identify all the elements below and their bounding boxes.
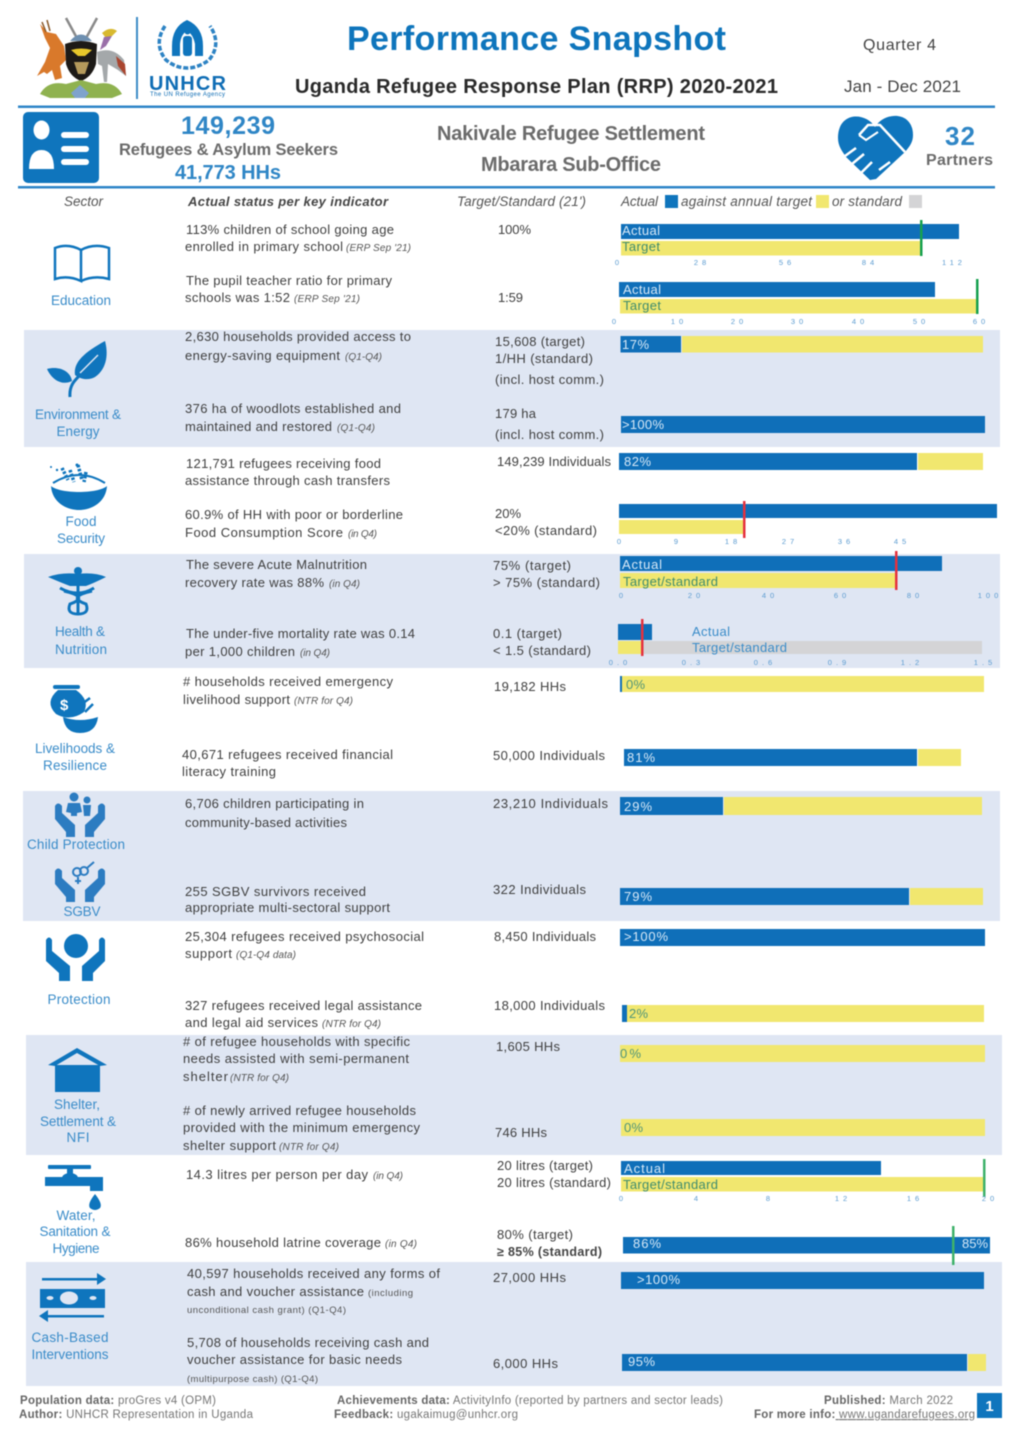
indicator: specific needs shelter: (NTR for Q4) xyxy=(230,1073,289,1084)
indicator: emergency shelter: (NTR for Q4) xyxy=(279,1142,339,1153)
indicator: litres per person: 12 xyxy=(835,1194,851,1203)
divider xyxy=(136,17,138,99)
panel: health and nutrition xyxy=(24,551,1002,668)
indicator: SGBV survivors: 255 SGBV survivors received xyxy=(185,884,366,899)
indicator: specific needs shelter: shelter xyxy=(183,1069,229,1084)
icon: UNHCR logo: The UN Refugee Agency xyxy=(150,92,225,98)
indicator: child participation: 29% xyxy=(624,799,652,814)
indicator: energy-saving: 2,630 households provided access to xyxy=(185,329,411,344)
indicator: litres per person: 4 xyxy=(694,1194,702,1203)
footer xyxy=(19,1395,975,1421)
icon: handshake heart xyxy=(838,116,913,180)
panel: cash-based interventions: Interventions xyxy=(32,1347,109,1362)
indicator: legal assistance: 327 refugees received legal assistance xyxy=(185,998,422,1013)
indicator: legal assistance: (NTR for Q4) xyxy=(322,1019,381,1030)
indicator: pupil teacher ratio: (ERP Sep '21) xyxy=(294,294,360,305)
indicator: acute malnutrition: 80 xyxy=(907,591,923,600)
indicator: financial literacy: literacy training xyxy=(182,764,276,779)
location xyxy=(437,123,705,176)
indicator: enrolment: Target xyxy=(622,239,660,254)
indicator: under-five mortality: 0.6 xyxy=(754,658,776,667)
indicator: enrolment: Actual xyxy=(622,223,660,238)
panel: environment and energy: Energy xyxy=(56,424,100,439)
indicator: enrolment: 84 xyxy=(862,258,878,267)
indicator: cash and voucher assistance: (including xyxy=(368,1288,413,1299)
indicator: litres per person: (in Q4) xyxy=(373,1171,403,1182)
indicator: enrolment xyxy=(185,220,966,267)
indicator: cash transfers xyxy=(185,453,983,488)
indicator: latrine coverage: 85% xyxy=(962,1236,988,1251)
indicator: latrine coverage: 86% household latrine coverage xyxy=(185,1235,381,1250)
table header and legend: against annual target xyxy=(681,194,813,209)
indicator: food consumption score xyxy=(185,501,997,546)
indicator: latrine coverage: ≥ 85% (standard) xyxy=(497,1245,602,1259)
indicator: under-five mortality: (in Q4) xyxy=(300,648,330,659)
indicator: specific needs shelter: needs assisted with semi-permanent xyxy=(183,1051,409,1066)
footer: Author: UNHCR Representation in Uganda xyxy=(19,1409,254,1421)
indicator: acute malnutrition: 20 xyxy=(688,591,704,600)
indicator: energy-saving: 17% xyxy=(622,337,649,352)
indicator: food consumption score: 20% xyxy=(495,506,521,521)
indicator: specific needs shelter: # of refugee households with specific xyxy=(183,1034,410,1049)
indicator: emergency livelihood: 0% xyxy=(626,677,645,692)
indicator: food consumption score: 18 xyxy=(725,537,741,546)
indicator: emergency shelter: 746 HHs xyxy=(495,1125,548,1140)
panel: livelihoods and resilience xyxy=(35,674,984,779)
indicator: litres per person: Actual xyxy=(624,1161,665,1176)
indicator: cash transfers: 149,239 Individuals xyxy=(497,454,612,469)
indicator: under-five mortality: 1.2 xyxy=(901,658,923,667)
sector label: Food xyxy=(66,514,96,529)
sector label: Environment & xyxy=(35,407,121,422)
sector label: SGBV xyxy=(64,904,100,919)
population figure: Refugees & Asylum Seekers xyxy=(119,141,338,159)
indicator: food consumption score: 45 xyxy=(894,537,910,546)
indicator: psychosocial support: (Q1-Q4 data) xyxy=(236,950,296,961)
indicator: woodlots xyxy=(185,401,985,442)
indicator: litres per person: 20 litres (standard) xyxy=(497,1175,611,1190)
indicator: acute malnutrition: (in Q4) xyxy=(329,579,360,590)
indicator: enrolment: 28 xyxy=(694,258,710,267)
table header and legend: Actual status per key indicator xyxy=(187,194,389,209)
icon: id card xyxy=(23,112,99,183)
panel: shelter, settlement and NFI: NFI xyxy=(66,1130,90,1145)
indicator: under-five mortality: < 1.5 (standard) xyxy=(493,643,591,658)
indicator: emergency livelihood: livelihood support xyxy=(183,692,290,707)
indicator: financial literacy xyxy=(182,747,961,779)
indicator: legal assistance: and legal aid services xyxy=(185,1015,318,1030)
indicator: emergency livelihood: 19,182 HHs xyxy=(494,679,566,694)
indicator: litres per person xyxy=(186,1158,998,1203)
location: Mbarara Sub-Office xyxy=(481,154,661,176)
indicator: SGBV survivors: 322 Individuals xyxy=(493,882,586,897)
indicator: psychosocial support: 8,450 Individuals xyxy=(494,929,596,944)
icon: money bag and bowl xyxy=(50,685,98,733)
subtitle: Uganda Refugee Response Plan (RRP) 2020-2021 xyxy=(295,76,778,98)
indicator: child participation xyxy=(185,796,982,830)
indicator: under-five mortality: 0.9 xyxy=(828,658,850,667)
sector label: Cash-Based xyxy=(32,1330,108,1345)
icon: food bowl xyxy=(50,464,107,510)
indicator: under-five mortality xyxy=(185,619,996,667)
indicator: financial literacy: 81% xyxy=(627,750,655,765)
icon: water tap and drop xyxy=(45,1165,103,1210)
indicator: woodlots: (Q1-Q4) xyxy=(337,423,375,434)
indicator: under-five mortality: The under-five mortality rate was 0.14 xyxy=(186,626,415,641)
indicator: basic needs cash: 6,000 HHs xyxy=(493,1356,558,1371)
population figure: 41,773 HHs xyxy=(175,162,281,184)
indicator: litres per person: 14.3 litres per person per day xyxy=(186,1167,368,1182)
indicator: emergency livelihood xyxy=(183,674,984,707)
indicator: emergency shelter xyxy=(183,1103,985,1153)
table header and legend: or standard xyxy=(832,194,902,209)
indicator: acute malnutrition: recovery rate was 88% xyxy=(185,575,324,590)
sector label: Livelihoods & xyxy=(35,741,115,756)
indicator: litres per person: 20 xyxy=(982,1194,998,1203)
panel: education xyxy=(51,220,989,326)
indicator: cash and voucher assistance: cash and voucher assistance xyxy=(187,1284,364,1299)
indicator: emergency shelter: shelter support xyxy=(183,1138,276,1153)
partners xyxy=(926,121,993,169)
icon: hands with gender symbols xyxy=(55,862,105,902)
indicator: psychosocial support: support xyxy=(185,946,232,961)
indicator: child participation: 6,706 children participating in xyxy=(185,796,364,811)
indicator: basic needs cash: 95% xyxy=(628,1354,655,1369)
indicator: emergency shelter: provided with the minimum emergency xyxy=(183,1120,420,1135)
indicator: SGBV survivors: appropriate multi-sectoral support xyxy=(185,900,390,915)
indicator: cash and voucher assistance: 40,597 households received any forms of xyxy=(187,1266,440,1281)
summary strip xyxy=(23,112,993,184)
footer: Achievements data: ActivityInfo (reported by partners and sector leads) xyxy=(337,1395,723,1407)
indicator: cash and voucher assistance: 27,000 HHs xyxy=(493,1270,566,1285)
indicator: emergency livelihood: # households received emergency xyxy=(183,674,394,689)
indicator: acute malnutrition xyxy=(185,551,1002,600)
icon: book xyxy=(55,246,109,281)
indicator: energy-saving: (Q1-Q4) xyxy=(345,352,382,363)
indicator: emergency livelihood: (NTR for Q4) xyxy=(294,696,353,707)
indicator: enrolment: 100% xyxy=(498,222,531,237)
indicator: pupil teacher ratio: Actual xyxy=(623,282,661,297)
indicator: enrolment: (ERP Sep '21) xyxy=(346,243,411,254)
indicator: legal assistance: 2% xyxy=(629,1006,648,1021)
table header and legend: Actual xyxy=(620,194,659,209)
indicator: under-five mortality: 0.0 xyxy=(609,658,631,667)
partners: Partners xyxy=(926,152,993,169)
indicator: under-five mortality: 1.5 xyxy=(974,658,996,667)
indicator: enrolment: enrolled in primary school xyxy=(185,239,343,254)
indicator: energy-saving: 15,608 (target) xyxy=(495,334,585,349)
indicator: cash and voucher assistance xyxy=(187,1266,984,1316)
indicator: woodlots: (incl. host comm.) xyxy=(495,427,604,442)
indicator: pupil teacher ratio: Target xyxy=(623,298,661,313)
indicator: energy-saving: 1/HH (standard) xyxy=(495,351,593,366)
indicator: woodlots: 376 ha of woodlots established and xyxy=(185,401,401,416)
indicator: acute malnutrition: The severe Acute Malnutrition xyxy=(186,557,367,572)
indicator: pupil teacher ratio: The pupil teacher ratio for primary xyxy=(186,273,392,288)
indicator: acute malnutrition: 100 xyxy=(978,591,1002,600)
footer: For more info: www.ugandarefugees.org xyxy=(754,1409,975,1421)
indicator: food consumption score: Food Consumption Score xyxy=(185,525,343,540)
indicator: enrolment: 56 xyxy=(779,258,795,267)
icon: protecting hands xyxy=(46,934,105,981)
indicator: specific needs shelter: 0% xyxy=(620,1046,641,1061)
indicator: enrolment: 112 xyxy=(942,258,966,267)
indicator: cash transfers: assistance through cash transfers xyxy=(185,473,390,488)
indicator: enrolment: 0 xyxy=(615,258,623,267)
indicator: pupil teacher ratio: 30 xyxy=(791,317,807,326)
sector label: Shelter, xyxy=(54,1097,100,1112)
table header and legend: Sector xyxy=(64,194,104,209)
sector label: Education xyxy=(51,293,111,308)
indicator: under-five mortality: Target/standard xyxy=(692,640,787,655)
indicator: cash and voucher assistance: unconditional cash grant) (Q1-Q4) xyxy=(187,1305,346,1316)
indicator: energy-saving: (incl. host comm.) xyxy=(495,372,604,387)
indicator: acute malnutrition: 40 xyxy=(762,591,778,600)
indicator: food consumption score: 27 xyxy=(782,537,798,546)
panel: food security: Security xyxy=(57,531,105,546)
location: Nakivale Refugee Settlement xyxy=(437,123,705,145)
indicator: acute malnutrition: Target/standard xyxy=(623,574,718,589)
indicator: litres per person: 0 xyxy=(619,1194,627,1203)
footer: Published: March 2022 xyxy=(824,1395,953,1407)
indicator: specific needs shelter: 1,605 HHs xyxy=(496,1039,560,1054)
sector label: Child Protection xyxy=(27,837,125,852)
partners: 32 xyxy=(945,121,975,151)
indicator: pupil teacher ratio: 60 xyxy=(973,317,989,326)
indicator: acute malnutrition: 60 xyxy=(834,591,850,600)
indicator: emergency shelter: 0% xyxy=(624,1120,643,1135)
footer: Population data: proGres v4 (OPM) xyxy=(20,1395,216,1407)
panel: shelter, settlement and NFI xyxy=(26,1034,1002,1155)
indicator: basic needs cash: (multipurpose cash) (Q1-Q4) xyxy=(187,1374,318,1385)
panel: cash-based interventions xyxy=(26,1262,1002,1386)
indicator: child participation: community-based activities xyxy=(185,815,348,830)
title: Performance Snapshot xyxy=(347,20,726,58)
indicator: psychosocial support xyxy=(185,929,985,961)
population figure xyxy=(119,112,338,184)
indicator: emergency shelter: # of newly arrived refugee households xyxy=(183,1103,416,1118)
date range: Jan - Dec 2021 xyxy=(844,77,961,96)
icon: hands with children xyxy=(55,792,105,837)
indicator: cash and voucher assistance: >100% xyxy=(637,1272,680,1287)
panel: livelihoods and resilience: Resilience xyxy=(43,758,107,773)
table header and legend: Target/Standard (21') xyxy=(457,194,586,209)
header xyxy=(37,17,961,99)
indicator: specific needs shelter xyxy=(183,1034,985,1084)
indicator: woodlots: 179 ha xyxy=(495,406,537,421)
indicator: pupil teacher ratio: 40 xyxy=(852,317,868,326)
indicator: food consumption score: (in Q4) xyxy=(348,529,377,540)
indicator: pupil teacher ratio: schools was 1:52 xyxy=(185,290,290,305)
indicator: latrine coverage: 86% xyxy=(633,1236,661,1251)
icon: cash with arrows xyxy=(39,1273,106,1322)
indicator: financial literacy: 40,671 refugees received financial xyxy=(182,747,393,762)
indicator: food consumption score: 36 xyxy=(838,537,854,546)
indicator: litres per person: 8 xyxy=(766,1194,774,1203)
footer: Feedback: ugakaimug@unhcr.org xyxy=(334,1409,518,1421)
indicator: litres per person: 16 xyxy=(907,1194,923,1203)
indicator: financial literacy: 50,000 Individuals xyxy=(493,748,606,763)
indicator: pupil teacher ratio: 10 xyxy=(671,317,687,326)
indicator: litres per person: 20 litres (target) xyxy=(497,1158,593,1173)
icon: coat of arms xyxy=(37,18,126,98)
sector label: Water, xyxy=(56,1208,96,1223)
indicator: acute malnutrition: 75% (target) xyxy=(493,558,571,573)
indicator: litres per person: Target/standard xyxy=(623,1177,718,1192)
indicator: SGBV survivors xyxy=(185,882,983,915)
sector label: Health & xyxy=(55,624,105,639)
indicator: legal assistance xyxy=(185,998,984,1030)
indicator: latrine coverage: 80% (target) xyxy=(497,1227,573,1242)
panel: shelter, settlement and NFI: Settlement & xyxy=(40,1114,116,1129)
sector label: Protection xyxy=(48,992,110,1007)
indicator: latrine coverage xyxy=(185,1227,990,1259)
page number: 1 xyxy=(985,1398,994,1415)
indicator: SGBV survivors: 79% xyxy=(624,889,652,904)
indicator: food consumption score: 9 xyxy=(674,537,682,546)
indicator: woodlots: maintained and restored xyxy=(185,419,332,434)
indicator: acute malnutrition: Actual xyxy=(622,557,662,572)
quarter label: Quarter 4 xyxy=(863,37,936,54)
indicator: psychosocial support: >100% xyxy=(624,929,668,944)
indicator: enrolment: 113% children of school going age xyxy=(186,222,394,237)
indicator: pupil teacher ratio: 20 xyxy=(731,317,747,326)
indicator: pupil teacher ratio: 1:59 xyxy=(498,290,523,305)
indicator: psychosocial support: 25,304 refugees received psychosocial xyxy=(185,929,424,944)
icon: caduceus xyxy=(48,567,106,614)
icon: house xyxy=(48,1048,107,1092)
indicator: energy-saving: energy-saving equipment xyxy=(185,348,340,363)
icon: money bag and bowl: $ xyxy=(60,697,69,714)
indicator: legal assistance: 18,000 Individuals xyxy=(494,998,606,1013)
population figure: 149,239 xyxy=(181,112,275,140)
panel: water, sanitation and hygiene: Hygiene xyxy=(52,1241,100,1256)
indicator: basic needs cash: voucher assistance for basic needs xyxy=(187,1352,402,1367)
indicator: food consumption score: 0 xyxy=(617,537,625,546)
indicator: cash transfers: 82% xyxy=(624,454,651,469)
icon: leaf xyxy=(47,341,107,397)
icon: UNHCR logo: UNHCR xyxy=(149,73,227,95)
panel: food security xyxy=(50,453,997,546)
icon: UNHCR logo xyxy=(149,20,227,98)
page number xyxy=(977,1393,1002,1418)
indicator: woodlots: >100% xyxy=(622,417,664,432)
indicator: basic needs cash xyxy=(187,1335,986,1385)
indicator: acute malnutrition: 0 xyxy=(619,591,627,600)
indicator: pupil teacher ratio xyxy=(185,273,989,326)
panel: environment and energy xyxy=(24,329,1000,447)
indicator: basic needs cash: 5,708 of households receiving cash and xyxy=(187,1335,429,1350)
table header and legend xyxy=(64,194,922,209)
indicator: energy-saving xyxy=(185,329,983,387)
panel: child protection and SGBV xyxy=(23,791,1000,921)
indicator: food consumption score: 60.9% of HH with poor or borderline xyxy=(185,507,403,522)
indicator: pupil teacher ratio: 0 xyxy=(612,317,620,326)
panel: water, sanitation and hygiene: Sanitation & xyxy=(40,1224,110,1239)
panel: protection xyxy=(46,929,985,1030)
indicator: under-five mortality: 0.3 xyxy=(682,658,704,667)
indicator: under-five mortality: per 1,000 children xyxy=(185,644,295,659)
indicator: under-five mortality: 0.1 (target) xyxy=(493,626,562,641)
panel: health and nutrition: Nutrition xyxy=(55,642,107,657)
indicator: acute malnutrition: > 75% (standard) xyxy=(493,575,600,590)
indicator: under-five mortality: Actual xyxy=(692,624,730,639)
panel: water, sanitation and hygiene xyxy=(40,1158,998,1259)
indicator: cash transfers: 121,791 refugees receiving food xyxy=(186,456,381,471)
indicator: food consumption score: <20% (standard) xyxy=(495,523,597,538)
indicator: child participation: 23,210 Individuals xyxy=(493,796,608,811)
target marker: latrine coverage xyxy=(952,1226,954,1265)
indicator: latrine coverage: (in Q4) xyxy=(385,1239,417,1250)
indicator: pupil teacher ratio: 50 xyxy=(913,317,929,326)
